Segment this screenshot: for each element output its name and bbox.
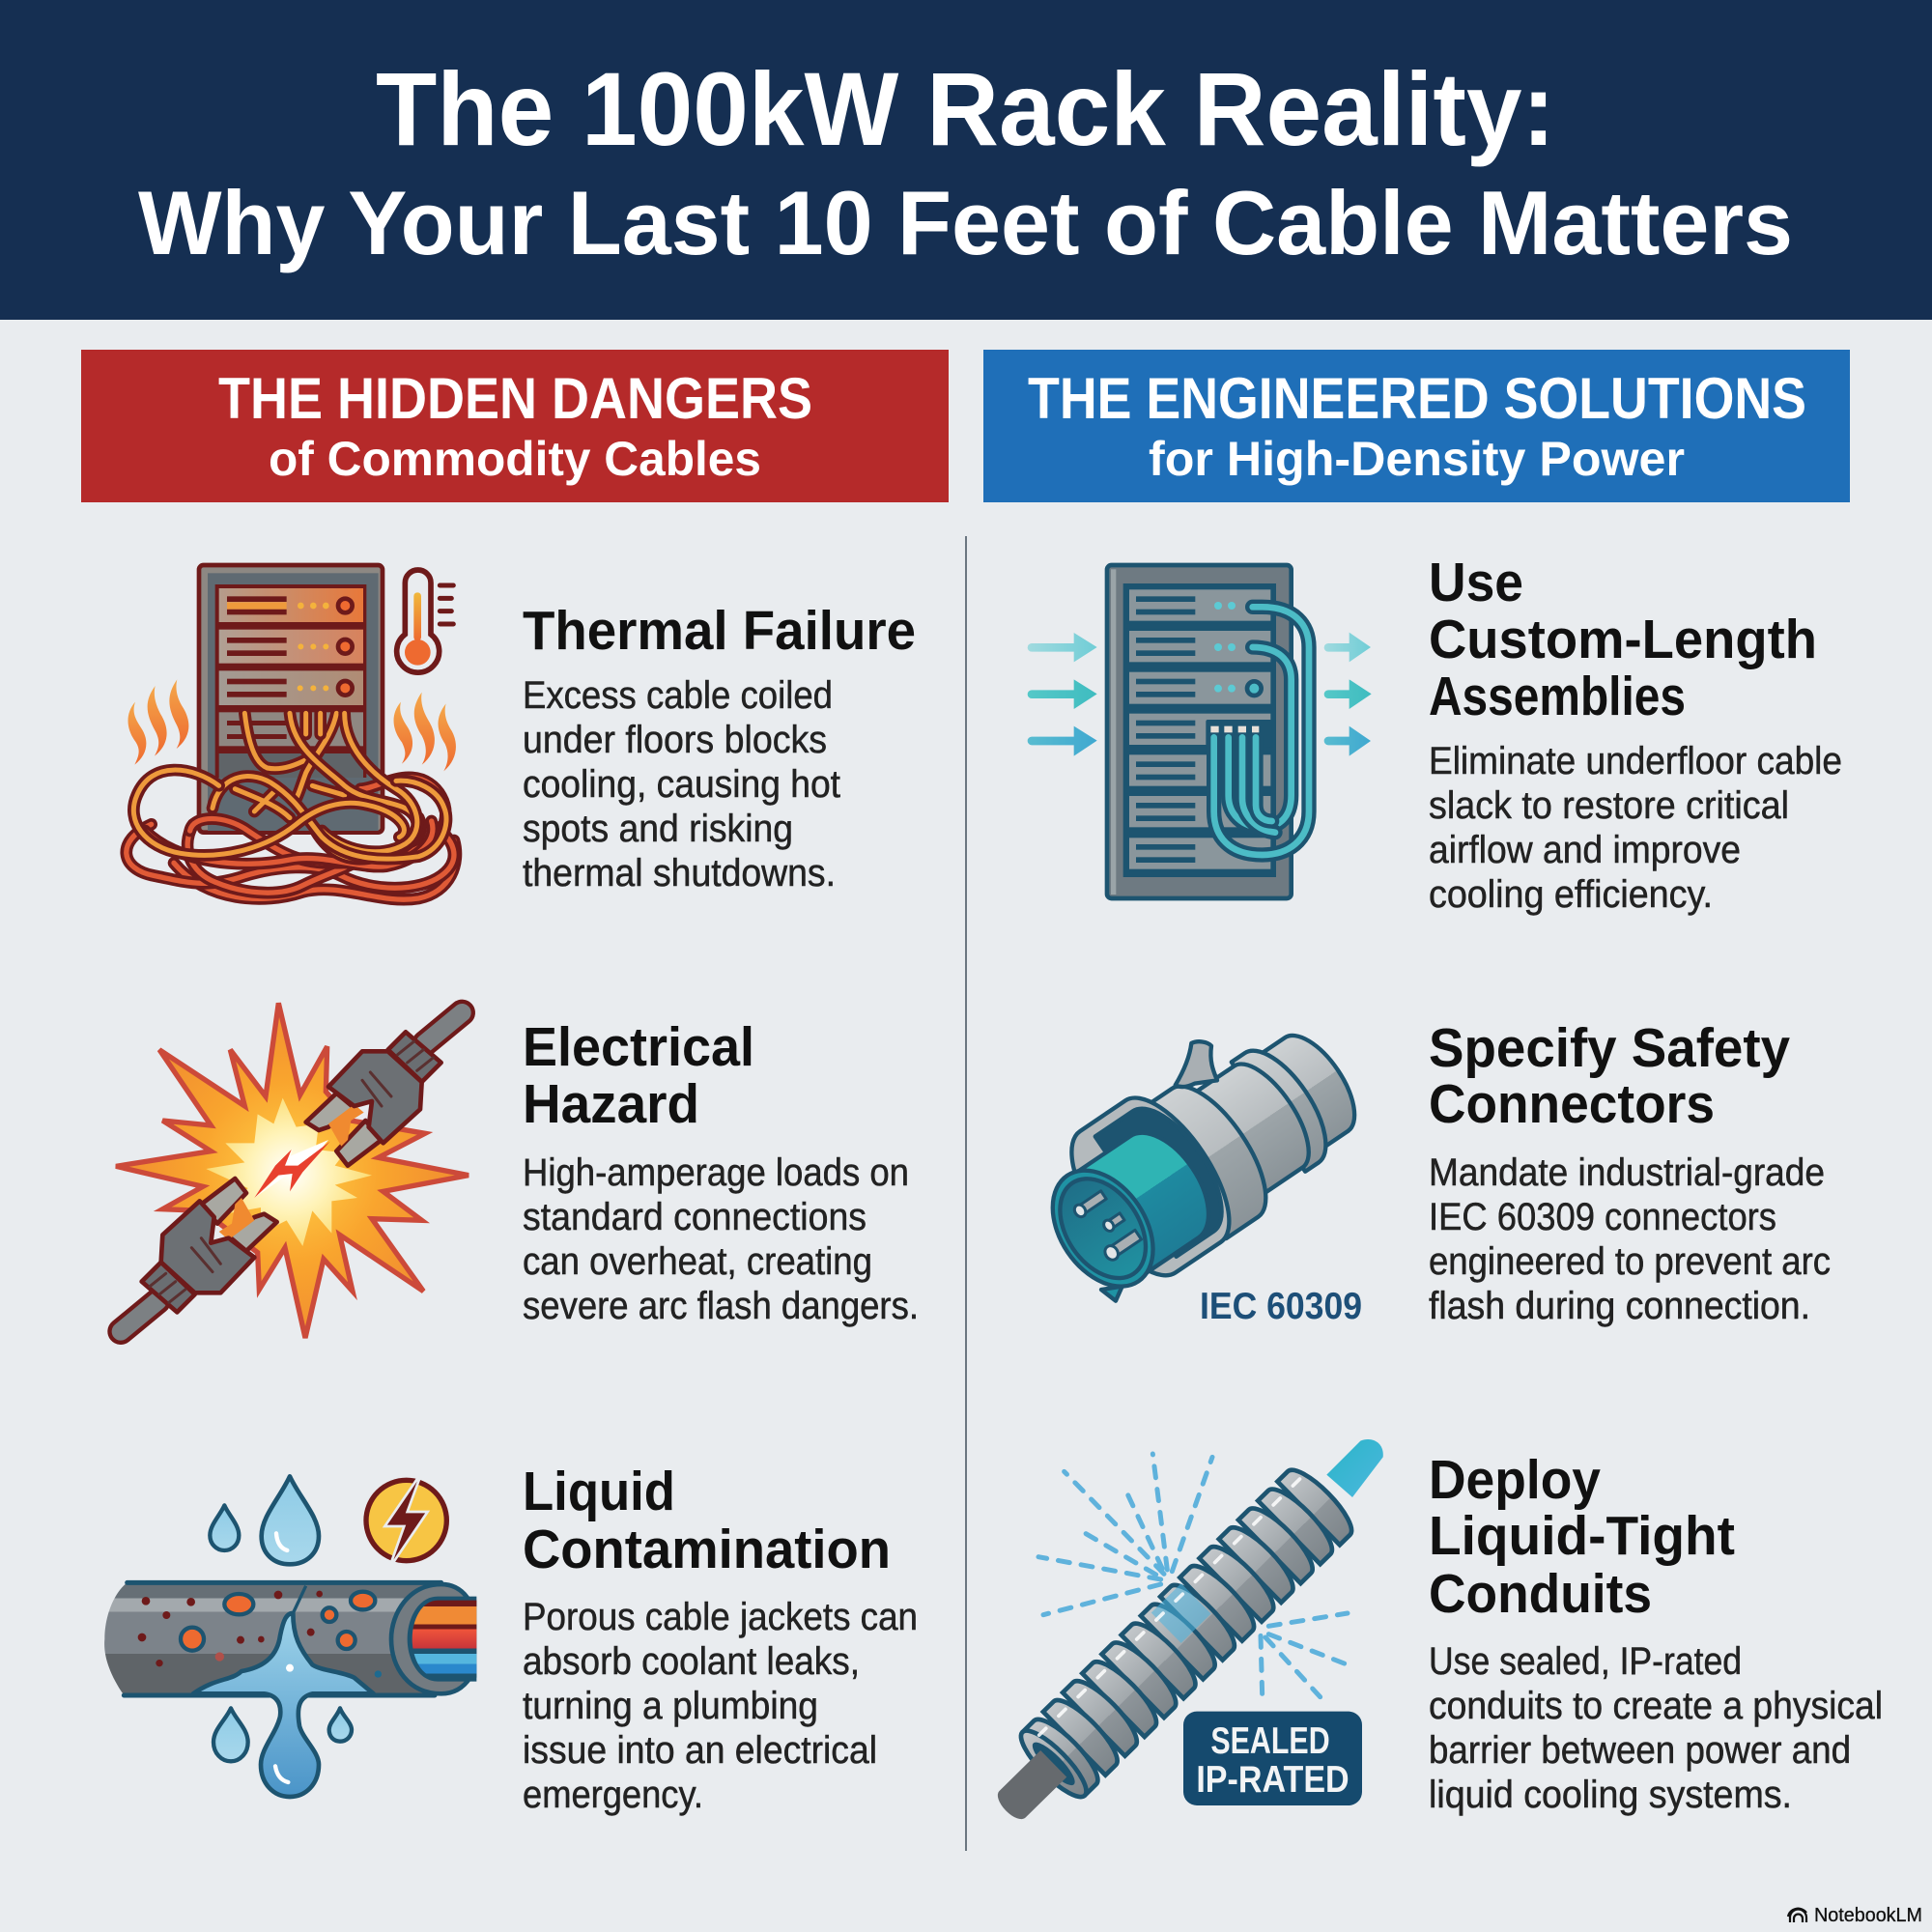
text block: thermal failure: Excess cable coiled — [523, 674, 833, 717]
panel: electrical hazard — [116, 1003, 919, 1338]
title — [138, 50, 1793, 273]
heading: safety connectors — [1429, 1017, 1790, 1135]
heading: liquid-tight conduits — [1429, 1449, 1735, 1625]
text block: thermal failure: cooling, causing hot — [523, 763, 840, 806]
text block: liquid-tight conduits — [1429, 1640, 1883, 1816]
heading: safety connectors: Connectors — [1429, 1073, 1715, 1135]
text block: safety connectors — [1429, 1151, 1831, 1327]
icon: overheating rack with tangled cables — [127, 565, 456, 899]
heading: custom-length assemblies: Assemblies — [1429, 666, 1686, 727]
panel: liquid contamination — [104, 1461, 918, 1816]
text block: custom-length assemblies: slack to restore critical — [1429, 784, 1789, 827]
text block: thermal failure — [523, 674, 840, 895]
heading: electrical hazard: Electrical — [523, 1016, 754, 1078]
panel: thermal failure — [127, 565, 916, 899]
heading: electrical hazard: Hazard — [523, 1073, 699, 1135]
watermark: NotebookLM: NotebookLM — [1814, 1905, 1922, 1926]
text block: safety connectors: engineered to prevent arc — [1429, 1240, 1831, 1283]
text block: electrical hazard: can overheat, creating — [523, 1240, 872, 1283]
text block: custom-length assemblies — [1429, 740, 1842, 916]
text block: liquid contamination: issue into an electrical — [523, 1729, 877, 1772]
heading: custom-length assemblies — [1429, 552, 1817, 727]
heading: liquid-tight conduits: Liquid-Tight — [1429, 1505, 1735, 1567]
text block: electrical hazard: High-amperage loads on — [523, 1151, 909, 1194]
column header: hidden dangers: of Commodity Cables — [269, 432, 761, 486]
text block: liquid-tight conduits: liquid cooling systems. — [1429, 1774, 1792, 1816]
heading: liquid contamination — [523, 1461, 891, 1580]
text block: liquid-tight conduits: conduits to create a physical — [1429, 1685, 1883, 1727]
text block: electrical hazard: severe arc flash dangers. — [523, 1285, 919, 1327]
icon: arc flash between plugs — [116, 1003, 469, 1338]
text block: liquid contamination — [523, 1596, 918, 1816]
column header: hidden dangers — [81, 350, 949, 502]
column header: engineered solutions: THE ENGINEERED SOLUTIONS — [1028, 366, 1806, 431]
text block: thermal failure: thermal shutdowns. — [523, 852, 836, 895]
heading: liquid-tight conduits: Conduits — [1429, 1563, 1652, 1625]
text block: thermal failure: spots and risking — [523, 808, 793, 850]
text block: safety connectors: flash during connection. — [1429, 1285, 1810, 1327]
text block: custom-length assemblies: Eliminate underfloor cable — [1429, 740, 1842, 782]
column header: engineered solutions — [983, 350, 1850, 502]
heading: liquid-tight conduits: Deploy — [1429, 1449, 1601, 1511]
text block: liquid contamination: emergency. — [523, 1774, 703, 1816]
text block: thermal failure: under floors blocks — [523, 719, 827, 761]
icon: tidy rack with airflow arrows — [1028, 565, 1372, 898]
text block: liquid contamination: Porous cable jackets can — [523, 1596, 918, 1638]
icon: plug — [306, 1012, 462, 1166]
text block: liquid contamination: absorb coolant leaks, — [523, 1640, 860, 1683]
icon: IEC 60309 connector — [1015, 992, 1381, 1317]
text block: electrical hazard: standard connections — [523, 1196, 867, 1238]
text block: electrical hazard — [523, 1151, 919, 1327]
text block: custom-length assemblies: airflow and improve — [1429, 829, 1741, 871]
column header: hidden dangers: THE HIDDEN DANGERS — [218, 366, 812, 431]
heading: electrical hazard — [523, 1016, 754, 1135]
label: IEC 60309: IEC 60309 — [1200, 1286, 1362, 1327]
icon: leaking porous cable — [104, 1472, 476, 1797]
panel: custom-length assemblies — [1028, 552, 1842, 916]
text block: safety connectors: IEC 60309 connectors — [1429, 1196, 1776, 1238]
heading: liquid contamination: Contamination — [523, 1519, 891, 1580]
badge label: IP-RATED — [1196, 1758, 1350, 1801]
badge label — [1196, 1719, 1350, 1801]
text block: liquid-tight conduits: barrier between power and — [1429, 1729, 1851, 1772]
text block: liquid-tight conduits: Use sealed, IP-rated — [1429, 1640, 1742, 1683]
text block: liquid contamination: turning a plumbing — [523, 1685, 818, 1727]
badge label: SEALED — [1210, 1719, 1330, 1762]
text block: custom-length assemblies: cooling efficiency. — [1429, 873, 1713, 916]
text block: safety connectors: Mandate industrial-grade — [1429, 1151, 1825, 1194]
title: Why Your Last 10 Feet of Cable Matters — [138, 172, 1793, 273]
title: The 100kW Rack Reality: — [376, 50, 1555, 167]
title banner — [0, 0, 1932, 320]
heading: custom-length assemblies: Custom-Length — [1429, 609, 1817, 670]
heading: thermal failure: Thermal Failure — [523, 600, 916, 662]
panel: liquid-tight conduits — [975, 1439, 1883, 1842]
icon: second plug — [121, 1179, 277, 1331]
heading: safety connectors: Specify Safety — [1429, 1017, 1790, 1079]
column header: engineered solutions: for High-Density Power — [1149, 432, 1685, 486]
heading: custom-length assemblies: Use — [1429, 552, 1523, 613]
panel: safety connectors — [1015, 992, 1831, 1327]
icon: sealed conduit with spray — [975, 1439, 1383, 1842]
heading: liquid contamination: Liquid — [523, 1461, 675, 1522]
